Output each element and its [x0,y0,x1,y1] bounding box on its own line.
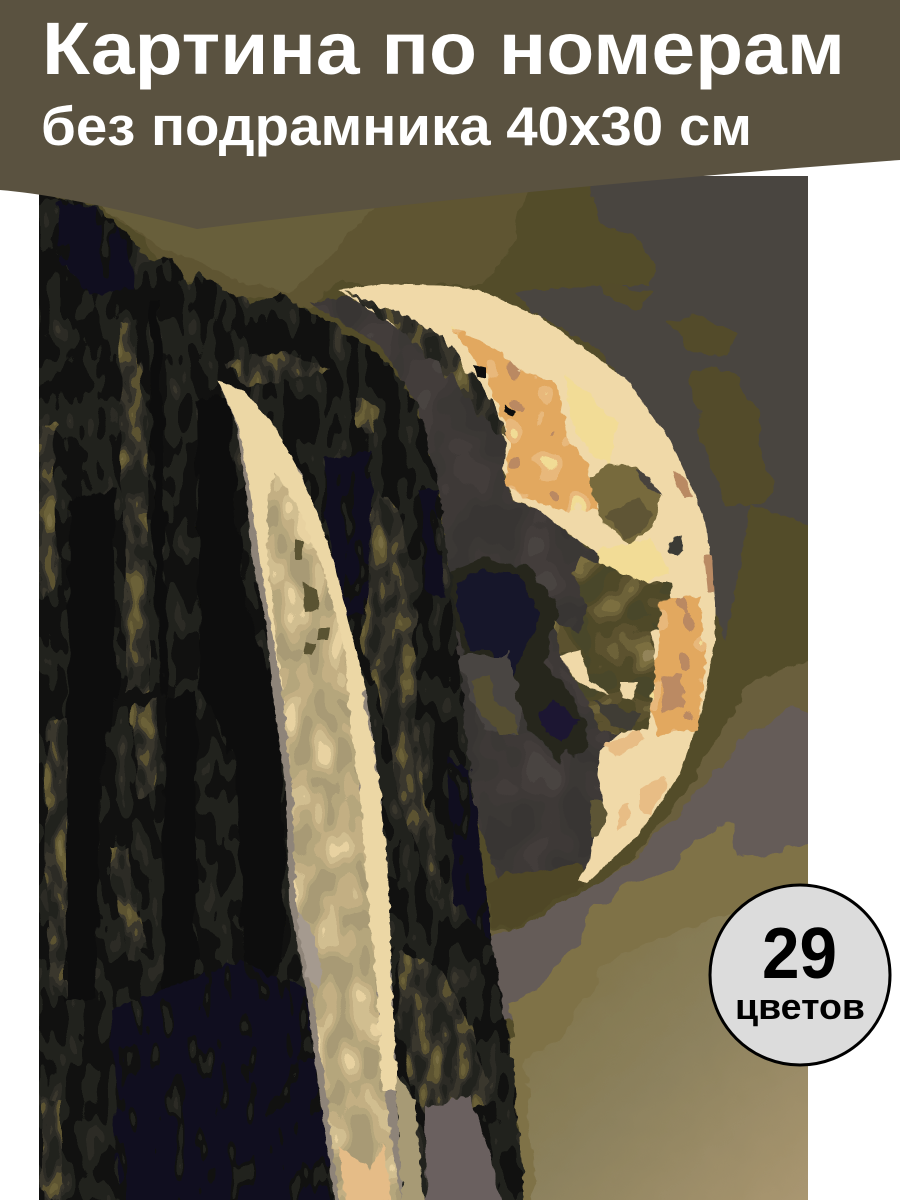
header ribbon [0,0,900,229]
cliff: olive columns [38,320,490,1200]
subtitle: без подрамника 40х30 см [41,95,752,157]
sky: olive band [490,661,808,936]
cliff: mauve grey lower right [424,1095,505,1200]
waterfall: cream right strip [345,660,398,1090]
badge: colour count [710,885,890,1065]
sand coloured lower sky [525,900,820,1200]
large crater [590,463,660,545]
olive shadow at moon base [498,863,584,885]
dark moon: navy patch [457,570,540,682]
moon surface: orange maria [450,325,600,512]
moon surface: dark lower edge [593,700,640,732]
lit crescent [339,284,715,883]
olive ridge highlights [225,352,380,436]
moon surface: peach streaks [605,730,668,830]
dark moon: dark halo [448,560,590,760]
cliff mottled base [30,192,526,1200]
waterfall: grey shadow side [218,380,405,1200]
crater dark rim [635,468,662,497]
sky: grey mauve band [490,707,820,1020]
moon surface: yellow patch [597,538,670,585]
sky: light olive cloud [99,205,376,292]
dark side of moon [309,296,640,885]
cliff [30,192,526,1200]
olive column left [108,320,156,960]
waterfall: olive markings [295,540,330,655]
moon [309,284,715,930]
title: Картина по номерам [42,7,845,90]
cliff: navy upper right [322,450,446,620]
sky: olive-tan lower [510,822,820,1200]
olive column far left [38,425,66,1200]
dark moon: lower navy patch [540,700,580,743]
cliff: navy upper left [56,200,135,295]
sky: olive patches in grey [600,282,772,510]
moon surface: black spots [473,365,516,416]
moon surface: speckled rim [345,292,508,440]
moon surface: jagged lower fringe [590,800,608,840]
badge label: цветов [735,986,865,1027]
waterfall: tan body [267,472,403,1200]
sky base [39,176,808,1200]
moon surface: brown lower patch [662,672,684,714]
small dark crater [668,536,684,556]
moon surface: orange lower patch [650,595,705,735]
dark moon: olive smudge [472,675,518,735]
moon edge brown spots [673,470,714,592]
sky: grey cloud upper right [515,170,820,640]
waterfall: peach base [339,1145,392,1200]
waterfall [218,380,424,1200]
moon surface: cream chunks [560,650,638,700]
waterfall: pale grey patch [296,910,322,990]
moon surface: lower olive mare [553,557,673,733]
sky: mid olive top [114,192,528,308]
waterfall: cream upper blade [218,380,366,705]
dark moon: grey patch [462,655,520,735]
badge number: 29 [762,914,837,994]
large crater inner [605,497,652,540]
badge circle [710,885,890,1065]
moon surface: yellow streak [565,375,618,465]
waterfall: sand right edge [396,1075,424,1200]
cliff: black columns [66,300,284,1000]
painting [30,170,820,1200]
cliff: navy base [110,960,338,1200]
cliff: navy right column [445,757,490,940]
olive lower right [396,950,490,1130]
olive column right of fall [362,490,444,900]
